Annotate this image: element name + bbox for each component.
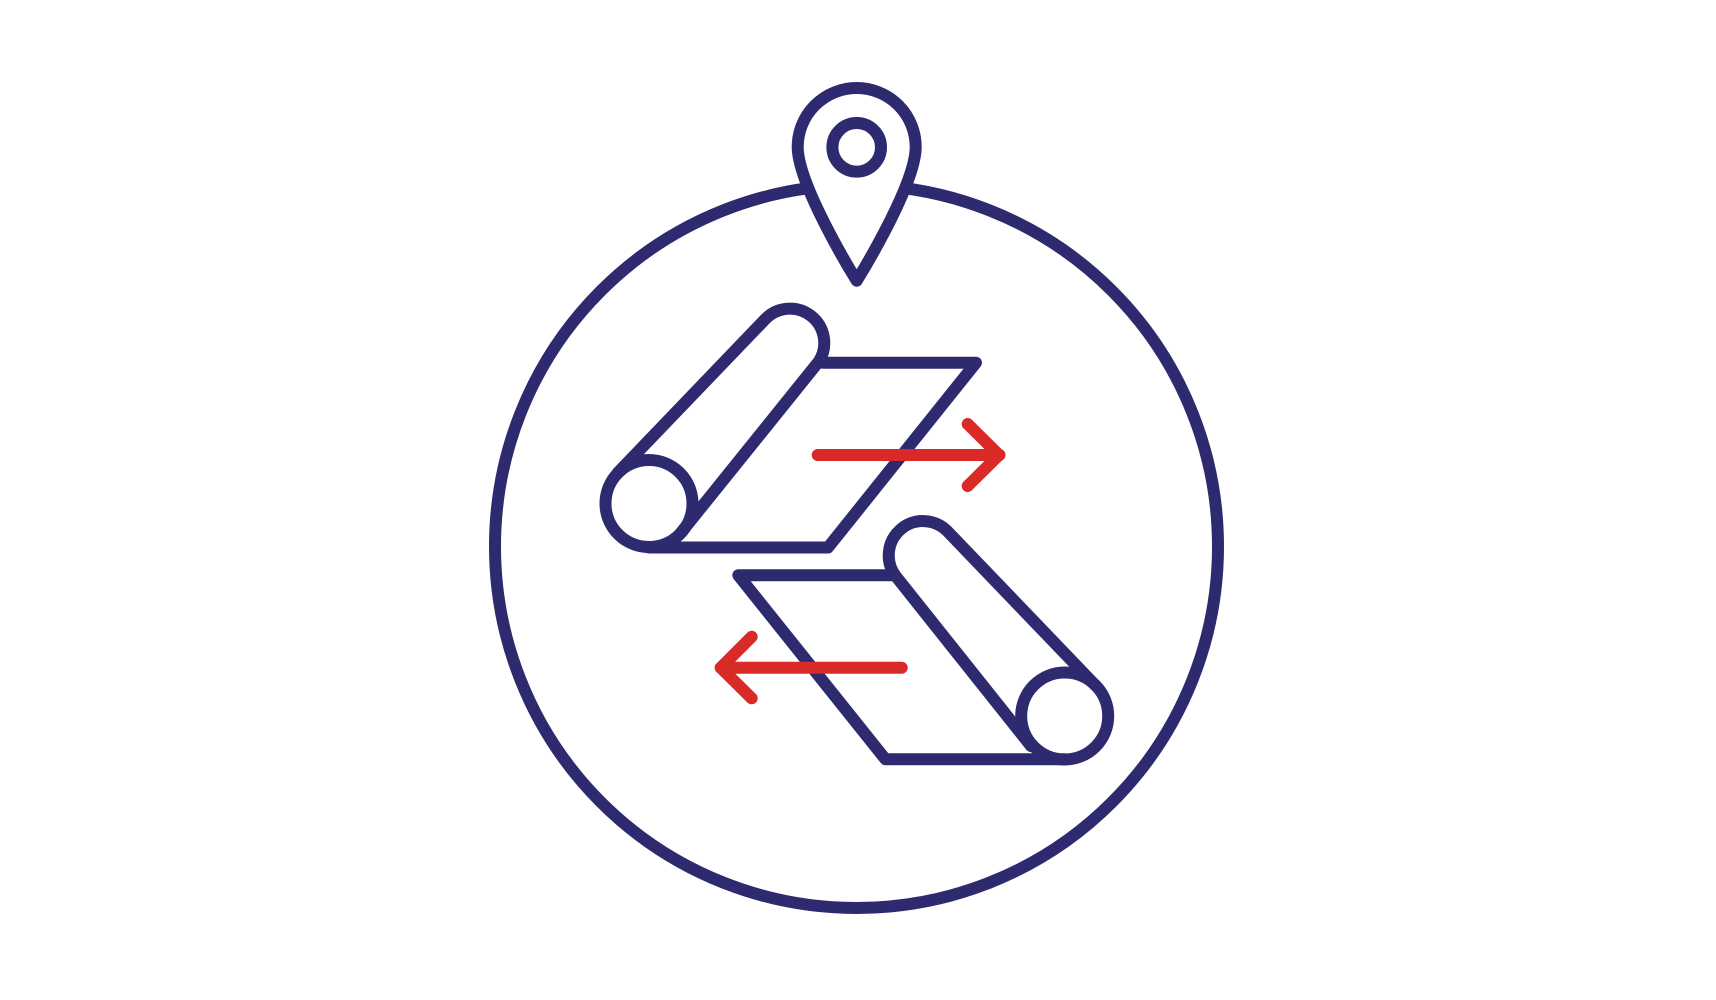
arrow: left bbox=[721, 637, 902, 698]
icon: location pin bbox=[798, 88, 916, 281]
icon: lower material roll bbox=[738, 521, 1108, 760]
icon: upper material roll bbox=[606, 309, 976, 548]
arrow: right bbox=[818, 424, 1000, 486]
large circle outline bbox=[495, 185, 1218, 908]
